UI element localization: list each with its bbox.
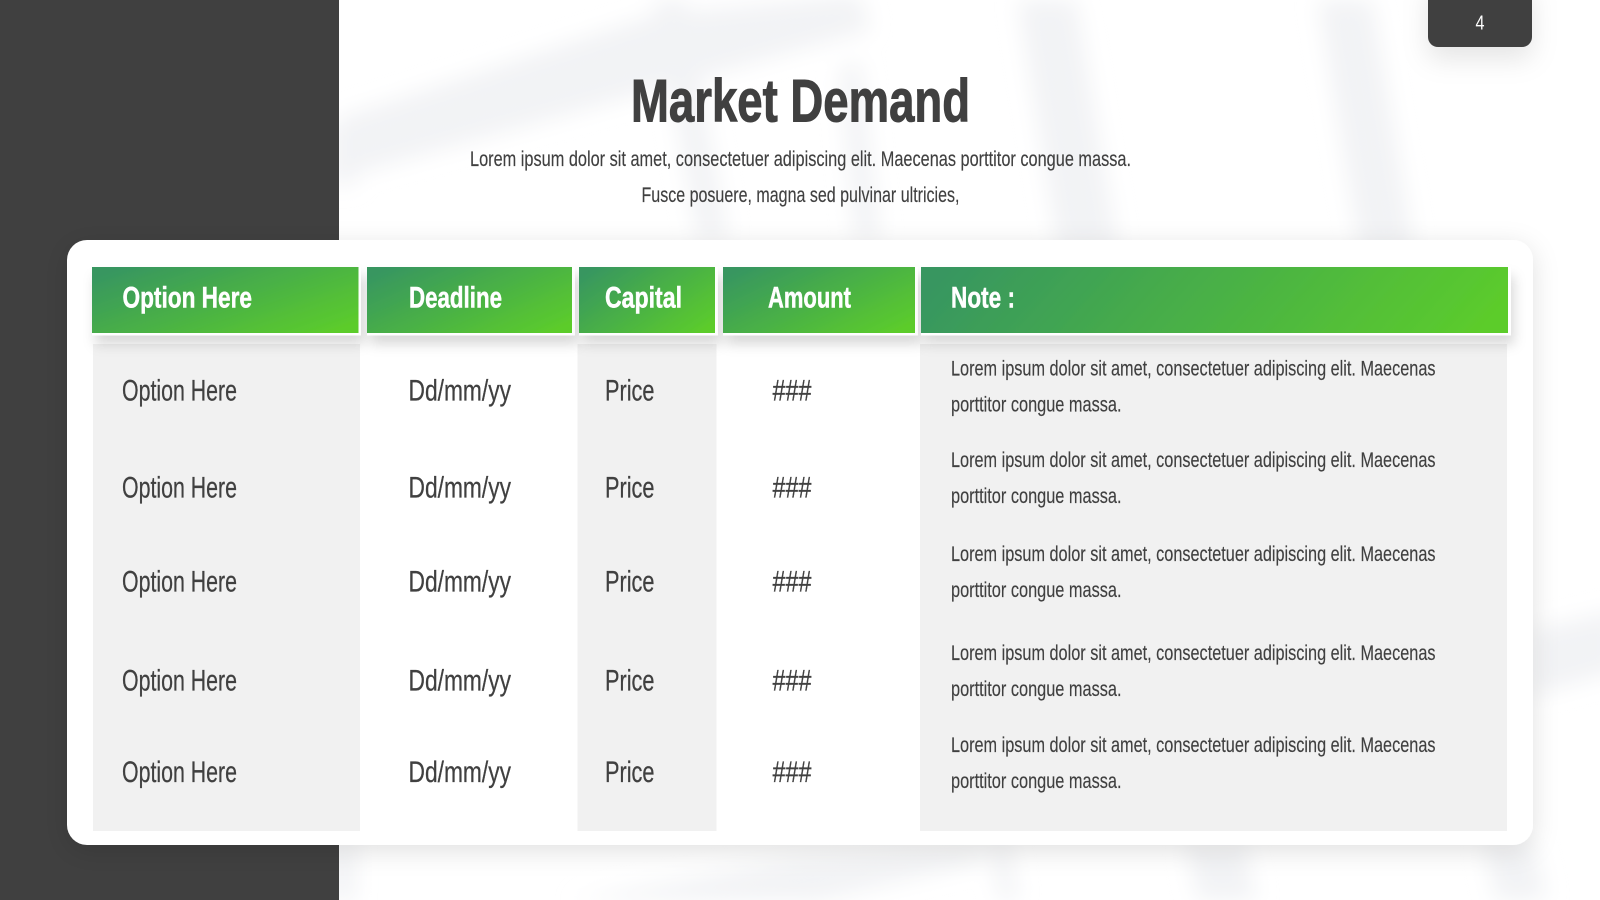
row 1: Price bbox=[605, 374, 654, 408]
row 4: Price bbox=[605, 664, 654, 698]
row 2: porttitor congue massa. bbox=[951, 484, 1122, 508]
page number tab: 4 bbox=[1476, 12, 1484, 34]
header row: Capital bbox=[605, 282, 682, 314]
row 2: Lorem ipsum dolor sit amet, consectetuer adipiscing elit. Maecenas bbox=[951, 448, 1436, 472]
header row: Note : bbox=[951, 282, 1015, 314]
subtitle: Fusce posuere, magna sed pulvinar ultricies, bbox=[642, 183, 960, 207]
row 5: Option Here bbox=[122, 756, 237, 789]
subtitle bbox=[470, 147, 1131, 207]
table column shading bbox=[93, 344, 1507, 831]
row 3: porttitor congue massa. bbox=[951, 578, 1122, 602]
row 3: Price bbox=[605, 566, 654, 598]
header row: Option Here bbox=[122, 282, 252, 314]
row 4: Option Here bbox=[122, 664, 237, 698]
sidebar bbox=[0, 0, 339, 900]
row 2: ### bbox=[772, 472, 812, 504]
header row: Deadline bbox=[409, 282, 502, 314]
row 1: Lorem ipsum dolor sit amet, consectetuer adipiscing elit. Maecenas bbox=[951, 356, 1436, 380]
row 4 bbox=[122, 641, 1436, 701]
row 3 bbox=[122, 542, 1436, 602]
row 4: Lorem ipsum dolor sit amet, consectetuer adipiscing elit. Maecenas bbox=[951, 641, 1436, 665]
row 3: Option Here bbox=[122, 566, 237, 598]
row 1: Dd/mm/yy bbox=[408, 374, 511, 408]
title: Market Demand bbox=[631, 68, 970, 134]
row 3: ### bbox=[772, 566, 812, 598]
background: blurred window shadows bbox=[330, 0, 1600, 900]
row 2: Price bbox=[605, 472, 654, 504]
row 2: Option Here bbox=[122, 472, 237, 504]
row 1: Option Here bbox=[122, 374, 237, 408]
row 5: Price bbox=[605, 756, 654, 789]
row 5: Dd/mm/yy bbox=[408, 756, 511, 789]
row 2: Dd/mm/yy bbox=[408, 472, 511, 504]
subtitle: Lorem ipsum dolor sit amet, consectetuer adipiscing elit. Maecenas porttitor congue massa. bbox=[470, 147, 1131, 171]
row 3: Lorem ipsum dolor sit amet, consectetuer adipiscing elit. Maecenas bbox=[951, 542, 1436, 566]
row 4: Dd/mm/yy bbox=[408, 664, 511, 698]
row 5: Lorem ipsum dolor sit amet, consectetuer adipiscing elit. Maecenas bbox=[951, 733, 1436, 757]
row 5 bbox=[122, 733, 1436, 793]
header row bbox=[92, 267, 1511, 336]
row 1 bbox=[122, 356, 1436, 416]
page number tab bbox=[1428, 0, 1532, 47]
row 4: porttitor congue massa. bbox=[951, 677, 1122, 701]
row 1: ### bbox=[772, 374, 812, 408]
row 4: ### bbox=[772, 664, 812, 698]
row 5: porttitor congue massa. bbox=[951, 769, 1122, 793]
row 5: ### bbox=[772, 756, 812, 789]
header row: Amount bbox=[768, 282, 851, 314]
row 3: Dd/mm/yy bbox=[408, 566, 511, 598]
panel: market demand table bbox=[67, 240, 1533, 845]
row 2 bbox=[122, 448, 1436, 508]
row 1: porttitor congue massa. bbox=[951, 392, 1122, 416]
